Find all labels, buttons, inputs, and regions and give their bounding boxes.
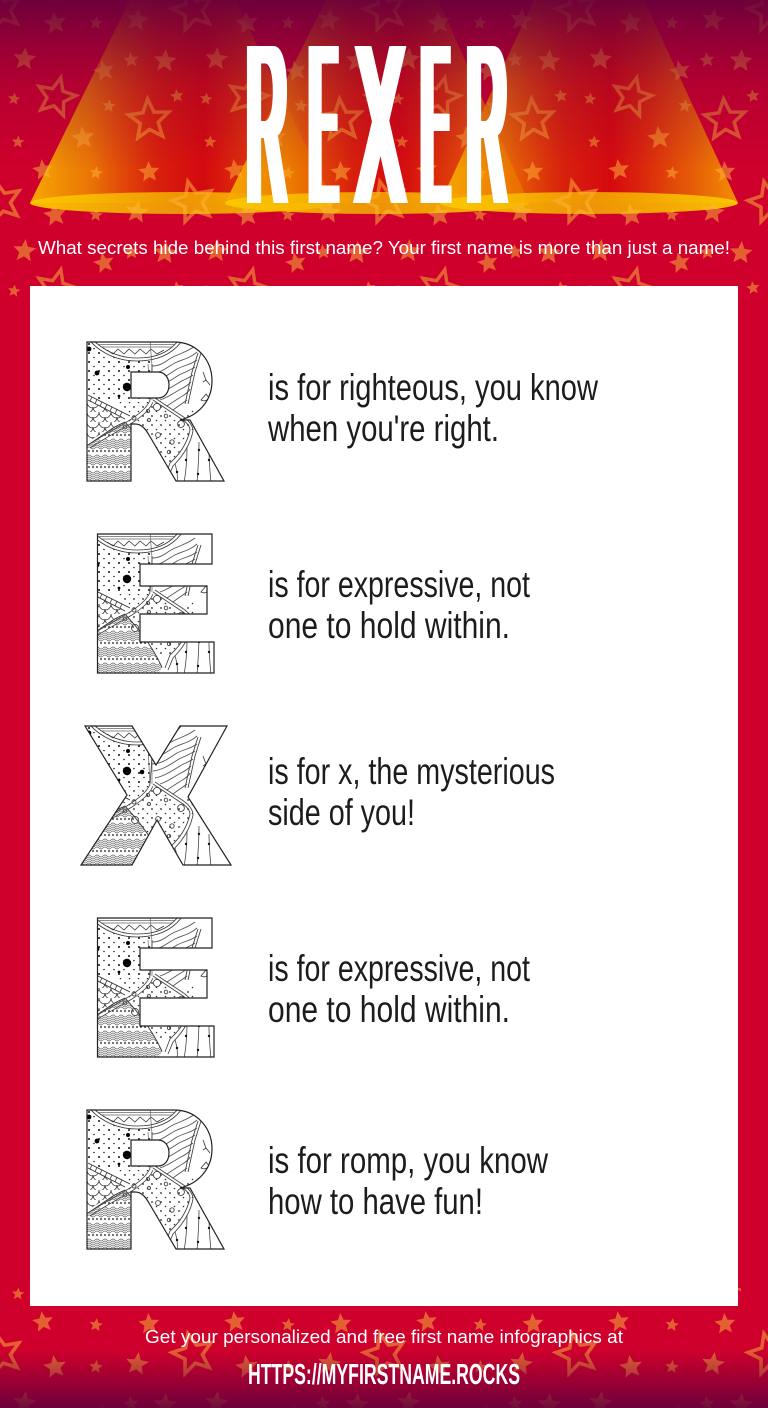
text: E line: one to hold within. xyxy=(268,605,510,646)
icon: patterned letter R xyxy=(86,1109,225,1250)
text: X line: side of you! xyxy=(268,792,415,833)
icon: patterned letter R xyxy=(86,341,225,482)
footer call to action: Get your personalized and free first name infographics at xyxy=(145,1327,623,1347)
text: second R line: how to have fun! xyxy=(268,1181,483,1222)
icon: patterned letter X xyxy=(80,725,232,866)
bottom shading xyxy=(0,1350,768,1408)
text: second R line: is for romp, you know xyxy=(268,1140,548,1181)
title: R xyxy=(247,0,287,252)
text: second E line xyxy=(268,948,531,1030)
title: X xyxy=(356,0,405,252)
icon: patterned letter E xyxy=(96,533,215,674)
text: R line: is for righteous, you know xyxy=(268,367,598,408)
footer url: HTTPS://MYFIRSTNAME.ROCKS xyxy=(248,1359,520,1391)
text: second E line: one to hold within. xyxy=(268,989,510,1030)
stars showing through spotlights xyxy=(44,7,726,214)
text: X line xyxy=(268,751,555,833)
text: second E line: is for expressive, not xyxy=(268,948,531,989)
title xyxy=(246,0,508,252)
title: E xyxy=(422,0,448,252)
right spotlight xyxy=(440,0,738,214)
top shading xyxy=(0,0,768,170)
text: R line xyxy=(267,367,598,449)
text: second R line xyxy=(268,1140,548,1222)
subtitle: What secrets hide behind this first name? Your first name is more than just a name! xyxy=(38,237,730,258)
centre spotlight xyxy=(225,0,529,214)
text: R line: when you're right. xyxy=(267,408,499,449)
title: E xyxy=(310,0,337,252)
panel: white content card xyxy=(30,286,738,1306)
text: E line: is for expressive, not xyxy=(268,564,531,605)
header star pattern xyxy=(0,0,768,300)
icon: patterned letter E xyxy=(96,917,215,1058)
text: X line: is for x, the mysterious xyxy=(268,751,555,792)
left spotlight xyxy=(30,0,334,214)
title: R xyxy=(467,0,507,252)
text: E line xyxy=(268,564,531,646)
footer star pattern xyxy=(0,1288,768,1408)
